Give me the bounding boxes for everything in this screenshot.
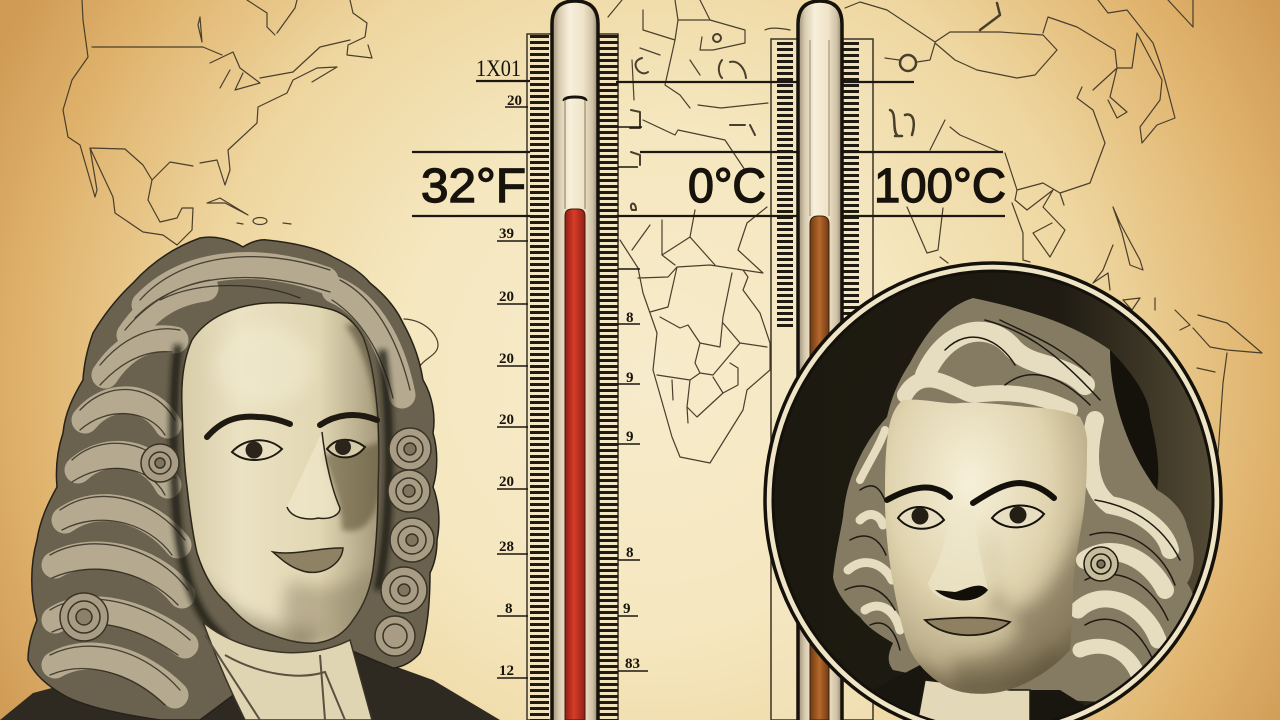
scale numbers left: 39 xyxy=(499,226,514,242)
wig locks xyxy=(55,266,402,695)
scale numbers right: 8 xyxy=(626,545,634,561)
map: small island beside the wig xyxy=(404,319,438,366)
eyes xyxy=(898,505,1044,529)
label: top scale: 1X01 xyxy=(476,56,521,81)
face shading xyxy=(208,321,379,643)
left thermometer tick marks xyxy=(540,35,609,720)
scale numbers right: 9 xyxy=(623,601,630,617)
world map outlines xyxy=(63,0,1262,495)
meniscus mark xyxy=(564,97,586,101)
collar xyxy=(915,680,1030,720)
nostril shadow xyxy=(935,586,988,601)
wig engraving lines xyxy=(50,257,410,705)
scale numbers left: 28 xyxy=(499,539,514,555)
wig highlights xyxy=(848,332,1170,680)
scale numbers right: 9 xyxy=(626,370,634,386)
scale numbers left xyxy=(497,93,528,679)
scale board right xyxy=(771,39,873,720)
mouth xyxy=(925,618,1010,635)
map: Asia xyxy=(845,0,1262,495)
face xyxy=(885,400,1087,694)
coat xyxy=(0,650,500,720)
wig base xyxy=(833,298,1195,703)
right thermometer tick marks xyxy=(785,42,851,330)
map: North America xyxy=(63,0,372,245)
scale numbers left: 20 xyxy=(499,289,514,305)
eyes xyxy=(232,439,365,460)
cravat folds xyxy=(205,635,345,720)
eyebrows xyxy=(207,415,377,437)
nose xyxy=(287,432,340,519)
scale numbers right: 8 xyxy=(626,310,634,326)
scale numbers left: 20 xyxy=(499,474,514,490)
right thermometer xyxy=(798,1,842,720)
portrait: right man in oval xyxy=(765,263,1221,720)
oval interior xyxy=(773,271,1213,720)
scale numbers right xyxy=(618,127,648,672)
coat xyxy=(906,665,1085,714)
label: 100°C: 100°C xyxy=(874,160,1006,213)
scale numbers left: 8 xyxy=(505,601,512,617)
inner bore xyxy=(565,100,585,209)
map: Europe xyxy=(608,0,790,170)
scale numbers right: 83 xyxy=(625,656,640,672)
map: Africa xyxy=(620,207,770,463)
map: Hispaniola xyxy=(253,218,267,224)
nose xyxy=(928,546,987,602)
left number underlines xyxy=(497,107,528,678)
tube xyxy=(798,1,842,720)
curl xyxy=(1084,547,1118,581)
map: Novaya Zemlya and marks xyxy=(890,3,1000,136)
neck cloth xyxy=(203,622,372,720)
inner bore xyxy=(810,40,829,216)
label: 0°C: 0°C xyxy=(688,160,766,213)
right number underlines xyxy=(618,127,648,671)
oval outer ring xyxy=(765,263,1221,720)
wig dark shadow xyxy=(174,345,389,640)
wig base xyxy=(28,237,439,720)
red column xyxy=(565,209,585,720)
scale numbers left: 20 xyxy=(499,351,514,367)
scale numbers left: 20 xyxy=(507,93,522,109)
portrait: left man xyxy=(0,237,500,720)
scale numbers left: 12 xyxy=(499,663,514,679)
label: 32°F: 32°F xyxy=(421,160,526,213)
reference lines xyxy=(412,81,1005,216)
scale numbers left: 20 xyxy=(499,412,514,428)
eyebrows xyxy=(887,483,1054,503)
scale board left xyxy=(527,34,618,720)
map: Europe circles and scribbles xyxy=(630,34,755,210)
scale numbers right: 9 xyxy=(626,429,634,445)
tube xyxy=(552,1,598,720)
mouth xyxy=(273,548,343,572)
face xyxy=(182,303,379,643)
brown column xyxy=(810,216,829,720)
wig engraving lines xyxy=(845,320,1180,665)
shadow wig mass xyxy=(1110,350,1158,490)
left thermometer xyxy=(552,1,598,720)
face shading xyxy=(914,510,1084,694)
spiral curls xyxy=(60,428,434,656)
